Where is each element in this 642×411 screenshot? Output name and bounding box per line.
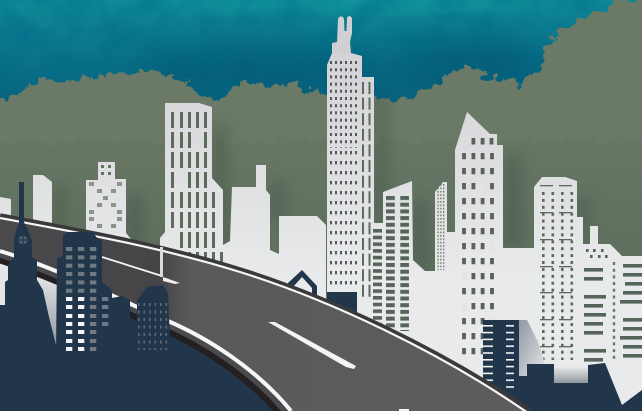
windows: white lines (483, 325, 514, 390)
windows: dotted slab (438, 184, 446, 270)
road edge: lower dark kerb (0, 258, 283, 411)
building: narrow slab (33, 175, 52, 228)
windows: far right bars (584, 249, 642, 362)
building: stepped low block (223, 165, 326, 310)
building: dotted block (86, 162, 131, 245)
green paint edge over the sky (0, 0, 642, 140)
road edge: lower white line (0, 251, 291, 411)
windows: bar block (386, 196, 409, 331)
navy foreground city (0, 182, 170, 352)
icon: navy triangle roof (288, 270, 317, 296)
highway road surface (0, 216, 530, 411)
road edge: upper white line (0, 216, 530, 411)
office block with lit windows (56, 232, 112, 352)
building: tall office block (160, 103, 223, 270)
sky: teal watercolor wash (0, 0, 642, 130)
lane dash: bottom (399, 409, 409, 411)
small navy block (112, 296, 130, 350)
navy building foreground right (483, 320, 642, 411)
road edge: lower grey kerb (0, 254, 287, 411)
windows: right office tower (540, 185, 574, 360)
soft shade under the low gap (554, 366, 588, 383)
grey building under the overpass (37, 270, 57, 345)
paint blotch on the edge (480, 75, 494, 81)
lane dash: short (163, 277, 180, 284)
building: main skyscraper (327, 16, 374, 320)
soft shadow beside navy building (519, 320, 545, 376)
sign post (160, 247, 163, 277)
spire tower (0, 182, 56, 345)
right skyline mass (373, 112, 642, 411)
navy ground (0, 295, 290, 411)
navy block with dots (137, 285, 170, 350)
windows: peaked tower (462, 138, 495, 364)
lane line: left section (102, 257, 162, 276)
building: far left stub (0, 190, 11, 225)
navy building behind highway (327, 292, 357, 322)
lane dash: long center (268, 322, 356, 369)
building shadows on the wall (55, 95, 589, 270)
pale building under the overpass left (0, 262, 15, 308)
